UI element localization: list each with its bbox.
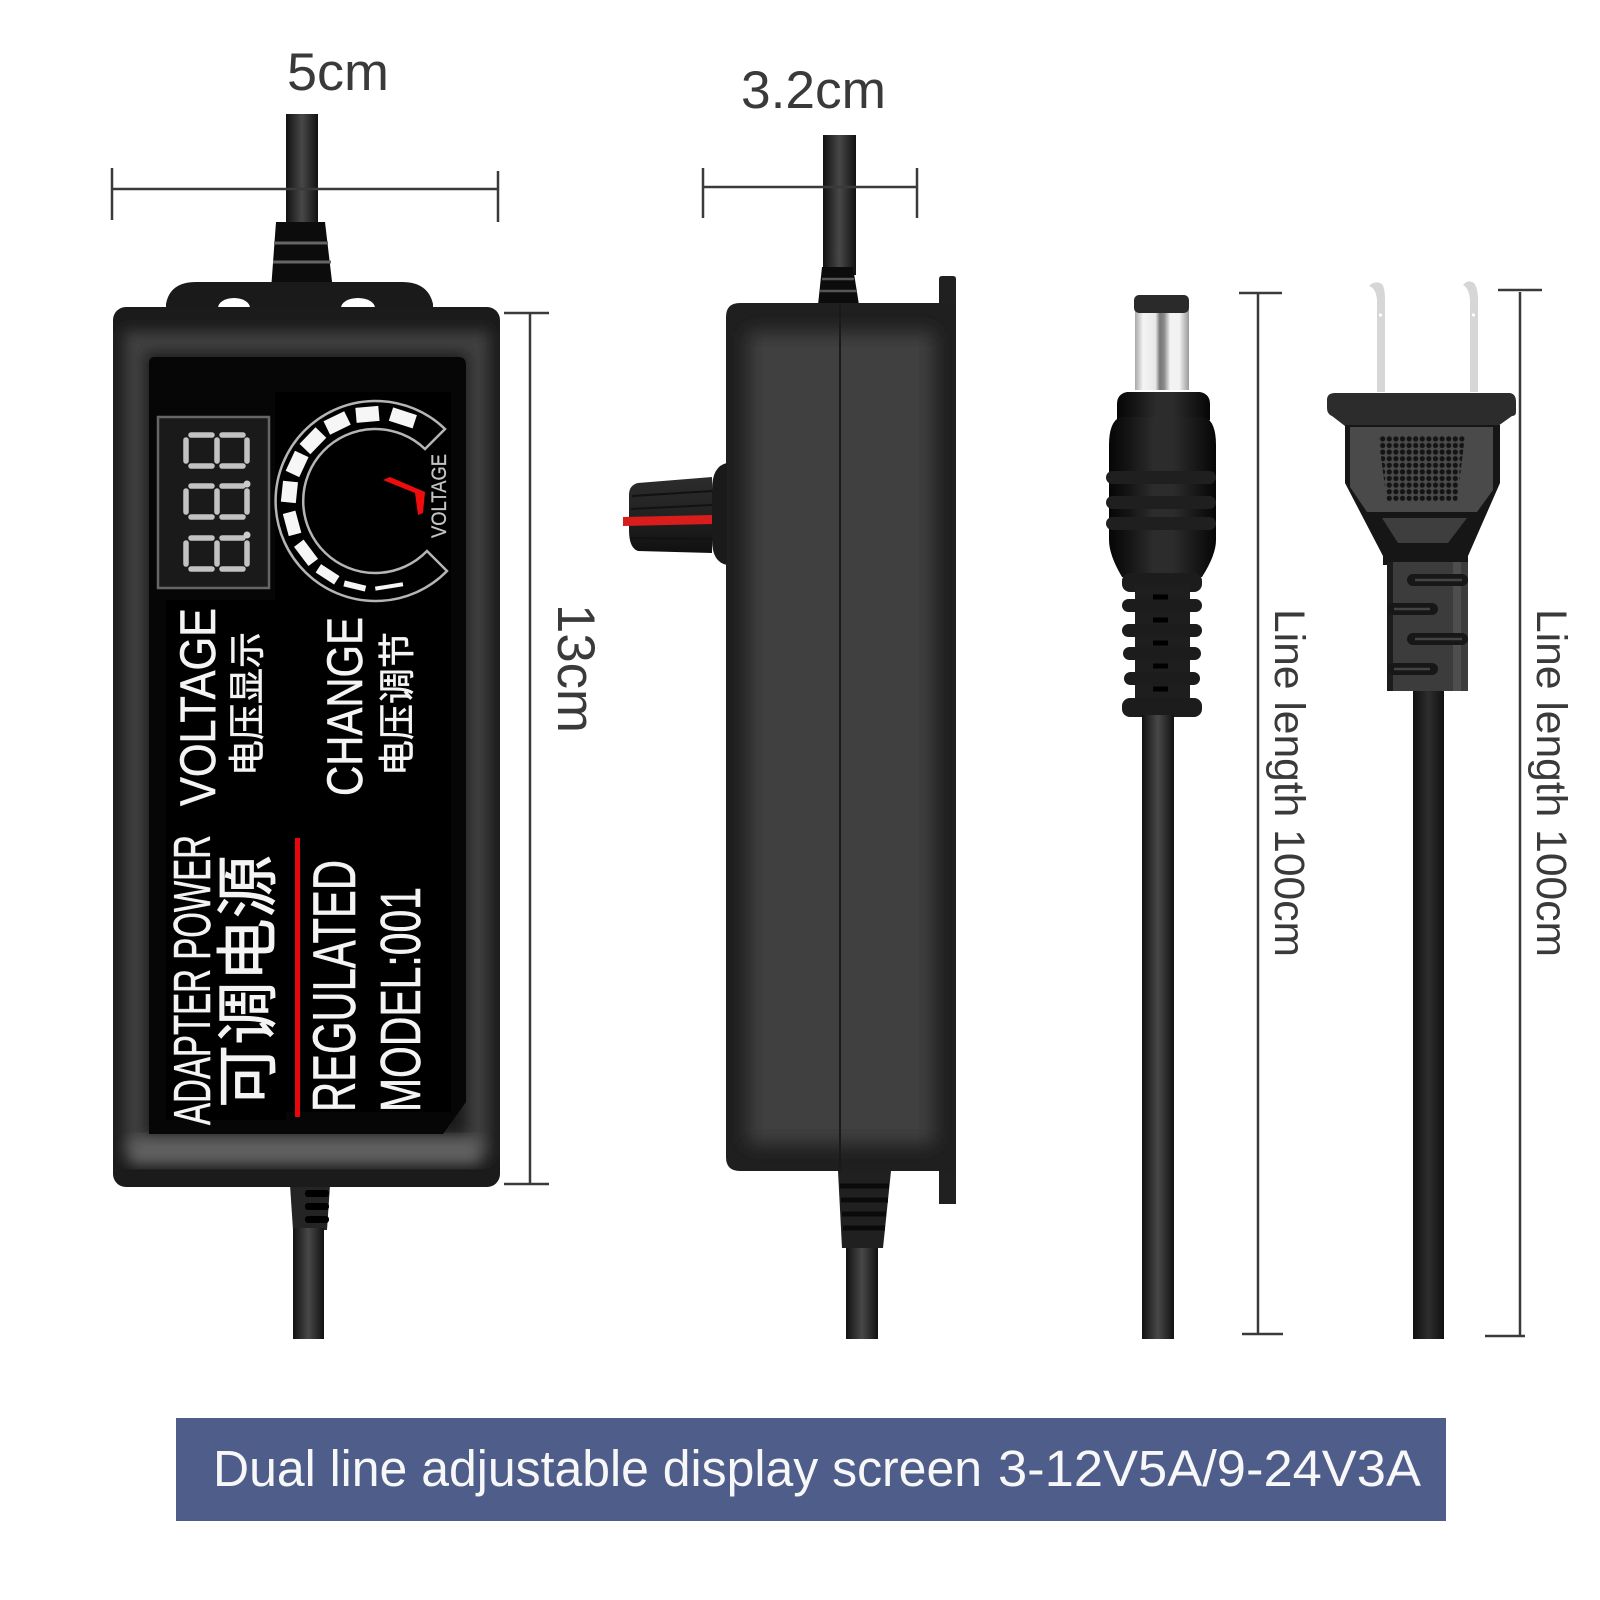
banner text: 3-12V5A/9-24V3A [998, 1440, 1421, 1497]
label: 3.2cm depth: 3.2cm [741, 61, 886, 120]
side cable top [823, 135, 856, 275]
side strain relief top [818, 267, 859, 305]
panel: front view of adapter [113, 222, 500, 1339]
side body [726, 303, 955, 1171]
dimension line: DC cable length [1239, 293, 1283, 1334]
voltage display 888 [158, 417, 269, 588]
dimension line: 3.2cm [703, 168, 917, 218]
plug grip dots [1378, 435, 1465, 502]
side flange [939, 276, 956, 1204]
panel text: CHANGE: CHANGE [317, 617, 373, 796]
banner text: Dual line adjustable display screen [213, 1440, 982, 1497]
panel text: voltage display CN: 电压显示 [227, 632, 268, 776]
DC strain relief [1122, 573, 1202, 717]
front strain relief top [271, 222, 333, 290]
dimension line: 13cm [504, 313, 549, 1184]
plug strain relief [1387, 562, 1468, 691]
side strain relief bottom [838, 1171, 891, 1248]
DC body [1106, 417, 1216, 577]
label: line length DC: Line length 100cm [1265, 609, 1313, 957]
plug prongs [1369, 281, 1478, 392]
plug cable [1413, 691, 1444, 1339]
front view cable top [286, 114, 318, 229]
panel text: REGULATED: REGULATED [301, 860, 368, 1112]
panel text: voltage regulation CN: 电压调节 [377, 632, 418, 776]
side knob [623, 463, 727, 565]
plug lower facet [1382, 518, 1467, 543]
plug flange [1327, 393, 1516, 426]
red divider [295, 838, 300, 1117]
label: line length AC: Line length 100cm [1527, 609, 1575, 957]
label: 13cm height: 13cm [546, 604, 605, 733]
voltage dial: VOLTAGE [428, 454, 451, 538]
DC barrel connector [1106, 295, 1216, 1339]
plug face [1350, 427, 1493, 512]
voltage dial [276, 401, 451, 601]
plug outer body [1345, 425, 1500, 565]
black label panel [149, 357, 466, 1134]
banner [176, 1418, 1446, 1521]
dimension line: 5cm [112, 168, 498, 222]
dimension line: AC cable length [1485, 290, 1542, 1336]
panel text: VOLTAGE: VOLTAGE [170, 608, 226, 806]
mounting tab [166, 282, 433, 318]
DC metal barrel [1135, 310, 1189, 390]
panel: side view of adapter [623, 135, 956, 1339]
AC wall plug [1327, 281, 1516, 1339]
DC collar [1117, 392, 1210, 420]
DC cable [1142, 715, 1174, 1339]
panel text: adjustable power CN: 可调电源 [214, 855, 284, 1108]
front strain relief bottom [290, 1185, 330, 1339]
label: 5cm width: 5cm [287, 43, 389, 102]
DC tip cap [1134, 295, 1189, 313]
adapter body [113, 307, 500, 1187]
panel text: ADAPTER POWER: ADAPTER POWER [164, 835, 222, 1125]
side cable bottom [846, 1248, 878, 1339]
panel text: MODEL:001: MODEL:001 [369, 887, 433, 1112]
